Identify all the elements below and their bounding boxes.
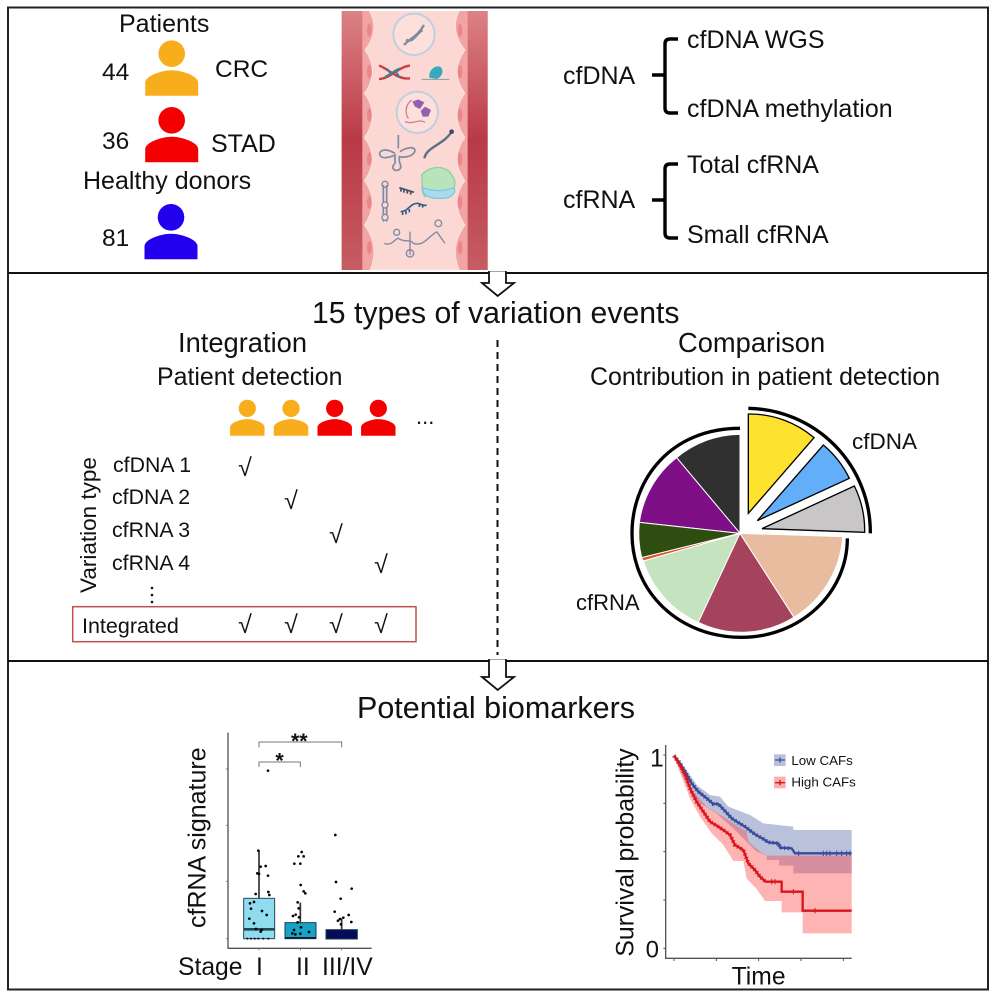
heading: patients: Patients (119, 10, 209, 38)
box plot: cfRNA signature: ** (291, 729, 308, 753)
vertical ellipsis (151, 587, 153, 603)
axis label: stage: Stage (178, 954, 243, 981)
count: CRC patients: 44 (102, 59, 129, 86)
check marks: √ (284, 611, 298, 639)
label: cfDNA WGS: cfDNA WGS (687, 26, 825, 54)
row label: cfDNA 2: cfDNA 2 (112, 485, 190, 509)
heading: potential biomarkers: Potential biomarkers (357, 691, 635, 725)
check marks: √ (374, 551, 388, 579)
check marks (238, 454, 388, 639)
check marks: √ (329, 611, 343, 639)
label: cfDNA group: cfDNA (852, 429, 917, 454)
survival chart: Survival probability (612, 748, 639, 957)
bracket: cfRNA (652, 164, 678, 238)
icons: patient row (230, 400, 396, 436)
check marks: √ (238, 611, 252, 639)
label: total cfRNA: Total cfRNA (687, 151, 819, 179)
axis label: variation type: Variation type (76, 457, 101, 593)
icon: CRC patient (145, 40, 198, 96)
label: STAD: STAD (211, 130, 276, 158)
tick label: III/IV: III/IV (322, 954, 373, 981)
pie chart: contribution (632, 408, 870, 637)
label: small cfRNA: Small cfRNA (687, 221, 829, 249)
arrow: to variation events (482, 272, 514, 296)
tick label: I: I (256, 954, 263, 981)
icon: STAD patient (145, 107, 198, 162)
subheading: contribution: Contribution in patient detection (590, 363, 940, 391)
survival chart: Low CAFs (791, 753, 853, 768)
check marks: √ (238, 454, 252, 482)
survival chart: 1 (650, 746, 664, 773)
axis label: cfRNA signature: cfRNA signature (184, 747, 212, 928)
check marks: √ (329, 521, 343, 549)
integrated row box (73, 607, 416, 642)
panel: biomarkers (178, 691, 856, 990)
label: CRC: CRC (215, 56, 268, 83)
illustration: blood vessel with cell-free nucleic acids (342, 11, 488, 270)
row label: cfRNA 4: cfRNA 4 (112, 551, 190, 575)
label: cfRNA group: cfRNA (576, 590, 640, 615)
count: healthy donors: 81 (102, 225, 129, 252)
heading: variation events: 15 types of variation events (312, 297, 680, 330)
survival chart: High CAFs (791, 775, 856, 790)
icon: healthy donor (144, 204, 198, 259)
row label: cfRNA 3: cfRNA 3 (112, 518, 190, 542)
count: STAD patients: 36 (102, 128, 129, 155)
box plot: cfRNA signature: * (275, 749, 284, 773)
label: cfDNA methylation: cfDNA methylation (687, 95, 893, 123)
check marks: √ (374, 611, 388, 639)
row label: integrated: Integrated (82, 614, 179, 638)
survival chart: 0 (646, 937, 659, 964)
box plot: cfRNA signature (226, 729, 372, 950)
heading: comparison: Comparison (678, 327, 825, 358)
survival chart: Time (732, 963, 786, 990)
bracket: cfDNA (652, 39, 678, 113)
label: cfDNA: cfDNA (563, 62, 636, 90)
subheading: patient detection: Patient detection (157, 363, 342, 391)
survival chart (612, 745, 856, 990)
divider: dashed line (496, 340, 498, 655)
panel: cohort and sequencing (83, 10, 893, 270)
arrow: to biomarkers (482, 660, 514, 690)
label: cfRNA: cfRNA (563, 186, 636, 214)
ellipsis: more patients: ... (416, 404, 434, 429)
heading: integration: Integration (178, 327, 307, 358)
panel: variation events (73, 297, 940, 655)
row label: cfDNA 1: cfDNA 1 (113, 453, 191, 477)
tick label: II: II (296, 954, 310, 981)
heading: healthy donors: Healthy donors (83, 167, 251, 195)
check marks: √ (284, 487, 298, 515)
